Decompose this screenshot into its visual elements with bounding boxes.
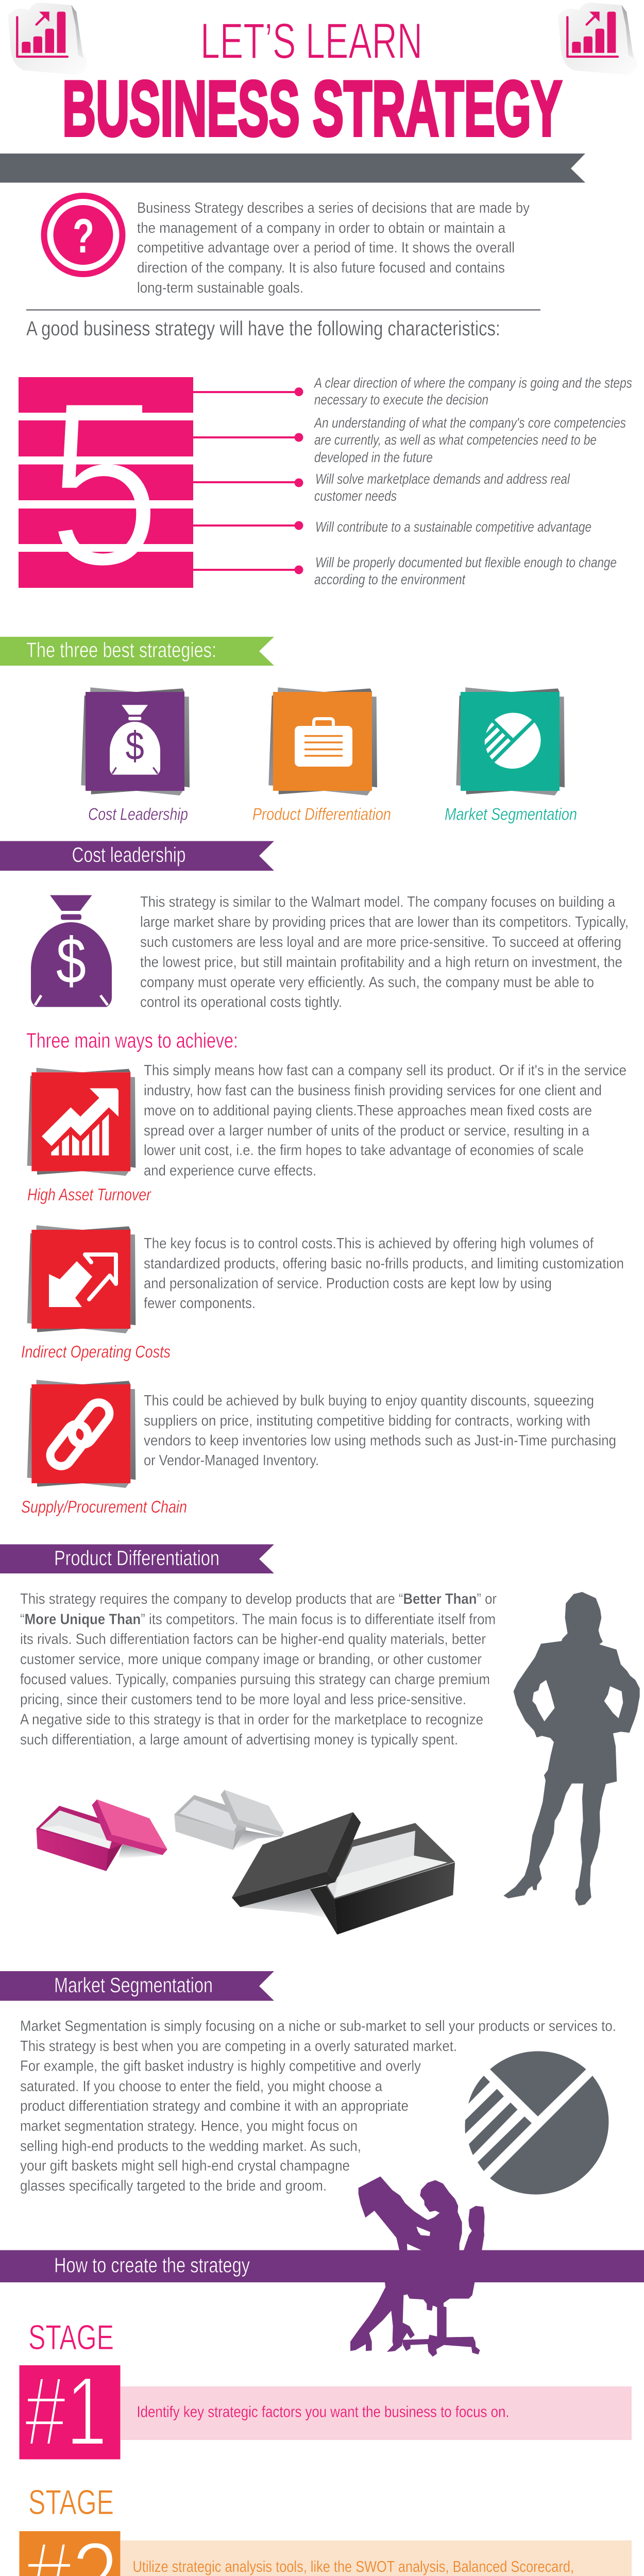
title: let's learn: LET’S LEARN [200, 13, 422, 69]
label: supply chain: Supply/Procurement Chain [21, 1497, 187, 1516]
graphic: five bars with numeral [19, 377, 193, 588]
text block: five characteristics: customer needs [314, 488, 397, 504]
label: high asset turnover: High Asset Turnover [27, 1185, 152, 1204]
text block: supply chain: suppliers on price, instituting competitive bidding for contracts, working with [144, 1413, 590, 1429]
text block: definition: competitive advantage over a period of time. It shows the overall [137, 240, 515, 256]
card: high asset turnover icon [27, 1068, 135, 1176]
card: market segmentation [456, 687, 565, 795]
text block: market segmentation: selling high-end products to the wedding market. As such, [20, 2138, 361, 2155]
text block: market segmentation: product differentiation strategy and combine it with an appropriate [20, 2098, 409, 2114]
icon: money bag [31, 895, 112, 1007]
heading: three main ways: Three main ways to achieve: [26, 1028, 238, 1052]
text block: product differentiation: This strategy requires the company to develop products that are “Better Than” or [20, 1591, 497, 1607]
text block: definition: long-term sustainable goals. [137, 280, 303, 296]
stage 1: Identify key strategic factors you want the business to focus on. [137, 2403, 509, 2420]
stage 2: STAGE [28, 2483, 114, 2522]
banner: how to create: How to create the strategy [54, 2253, 250, 2277]
banner: cost leadership: Cost leadership [72, 843, 185, 867]
text block: high asset turnover [144, 1062, 626, 1179]
text block: definition: Business Strategy describes a series of decisions that are made by [137, 200, 530, 216]
text block: indirect operating costs [144, 1235, 624, 1312]
card: indirect operating costs icon [27, 1225, 135, 1333]
banner: market segmentation: Market Segmentation [54, 1973, 213, 1997]
text block: definition: the management of a company in order to obtain or maintain a [137, 220, 506, 236]
text block: product differentiation [20, 1591, 497, 1748]
label: cost leadership: Cost Leadership [88, 805, 188, 823]
text block: product differentiation: such differentiation, a large amount of advertising money is typically spent. [20, 1732, 458, 1748]
text block: high asset turnover: spread over a larger number of units of the product or service, resulting in a [144, 1123, 590, 1139]
text block: product differentiation: A negative side to this strategy is that in order for the marketplace to recognize [20, 1711, 483, 1728]
banner: product differentiation [0, 1545, 274, 1573]
illustration: gift boxes [37, 1790, 455, 1935]
text block: five characteristics: necessary to execute the decision [314, 392, 488, 408]
text block: cost leadership: company must operate very efficiently. As such, the company must be able to [140, 974, 594, 991]
text block: high asset turnover: industry, how fast can the business finish providing services for one client and [144, 1082, 602, 1099]
banner: market segmentation [0, 1971, 274, 2001]
text block: market segmentation: This strategy is best when you are competing in a overly saturated market. [20, 2038, 457, 2055]
text block: definition: direction of the company. It is also future focused and contains [137, 260, 505, 276]
text block: five characteristics [313, 375, 632, 587]
stage 1: #1 [25, 2357, 107, 2466]
text block: cost leadership [140, 894, 629, 1011]
card: product differentiation [268, 687, 377, 795]
stage 2 [20, 2483, 632, 2576]
heading: characteristics: A good business strategy will have the following characteristics: [26, 317, 500, 340]
icon: pie chart [465, 2051, 608, 2194]
label: product differentiation: Product Differentiation [252, 805, 391, 823]
banner: how to create [0, 2250, 644, 2282]
label: market segmentation: Market Segmentation [445, 805, 577, 823]
icon: money bag: $ [56, 925, 86, 997]
text block: indirect operating costs: fewer components. [144, 1295, 256, 1312]
text block: high asset turnover: move on to additional paying clients.These approaches mean fixed costs are [144, 1103, 592, 1119]
icon: question mark [44, 196, 123, 274]
text block: supply chain [144, 1393, 616, 1469]
text block: market segmentation: saturated. If you choose to enter the field, you might choose a [20, 2078, 383, 2095]
icon: chart note left [8, 3, 87, 75]
text block: product differentiation: customer service, more unique company image or branding, or other customer [20, 1651, 482, 1668]
text block: market segmentation: glasses specifically targeted to the bride and groom. [20, 2178, 327, 2194]
banner: three best strategies: The three best strategies: [26, 638, 216, 662]
label: indirect operating costs: Indirect Operating Costs [21, 1342, 171, 1361]
text block: market segmentation: For example, the gift basket industry is highly competitive and overly [20, 2058, 421, 2074]
text block: supply chain: or Vendor-Managed Inventory. [144, 1452, 319, 1469]
text block: five characteristics: according to the environment [314, 571, 466, 587]
text block: five characteristics: developed in the future [314, 449, 433, 465]
card: cost leadership [81, 687, 190, 795]
text block: product differentiation: its rivals. Such differentiation factors can be higher-end quality materials, better [20, 1631, 486, 1648]
text block: supply chain: This could be achieved by bulk buying to enjoy quantity discounts, squeezing [144, 1393, 594, 1409]
text block: product differentiation: “More Unique Than” its competitors. The main focus is to differentiate itself from [20, 1612, 496, 1628]
icon: chart note right [558, 3, 637, 75]
text block: market segmentation: your gift baskets might sell high-end crystal champagne [20, 2158, 350, 2174]
text block: indirect operating costs: The key focus is to control costs.This is achieved by offering high volumes of [144, 1235, 594, 1252]
card: supply chain icon [27, 1380, 135, 1488]
text block: definition [137, 200, 530, 296]
text block: high asset turnover: and experience curve effects. [144, 1162, 316, 1179]
card: cost leadership: $ [126, 723, 144, 769]
stage 1 [20, 2318, 632, 2466]
text block: indirect operating costs: and personalization of service. Production costs are kept low by using [144, 1276, 552, 1292]
text block: product differentiation: pricing, since their customers tend to be more loyal and less price-sensitive. [20, 1691, 466, 1708]
connectors [193, 387, 303, 574]
icon: question mark: ? [73, 209, 94, 263]
text block: cost leadership: control its operational costs tightly. [140, 994, 342, 1011]
text block: product differentiation: focused values. Typically, companies pursuing this strategy can charge premium [20, 1671, 490, 1688]
banner: cost leadership [0, 841, 274, 871]
text block: market segmentation: market segmentation strategy. Hence, you might focus on [20, 2118, 358, 2134]
graphic: five bars with numeral: 5 [47, 352, 161, 616]
text block: high asset turnover: lower unit cost, i.e. the firm hopes to take advantage of economies of scale [144, 1142, 584, 1159]
banner: gray ribbon [0, 154, 585, 182]
text block: market segmentation [20, 2018, 616, 2194]
illustration: seated woman [350, 2176, 485, 2357]
banner: product differentiation: Product Differentiation [54, 1546, 219, 1570]
stage 1: STAGE [28, 2318, 114, 2357]
text block: five characteristics: Will solve marketplace demands and address real [315, 471, 570, 487]
illustration: woman silhouette [503, 1592, 640, 1906]
